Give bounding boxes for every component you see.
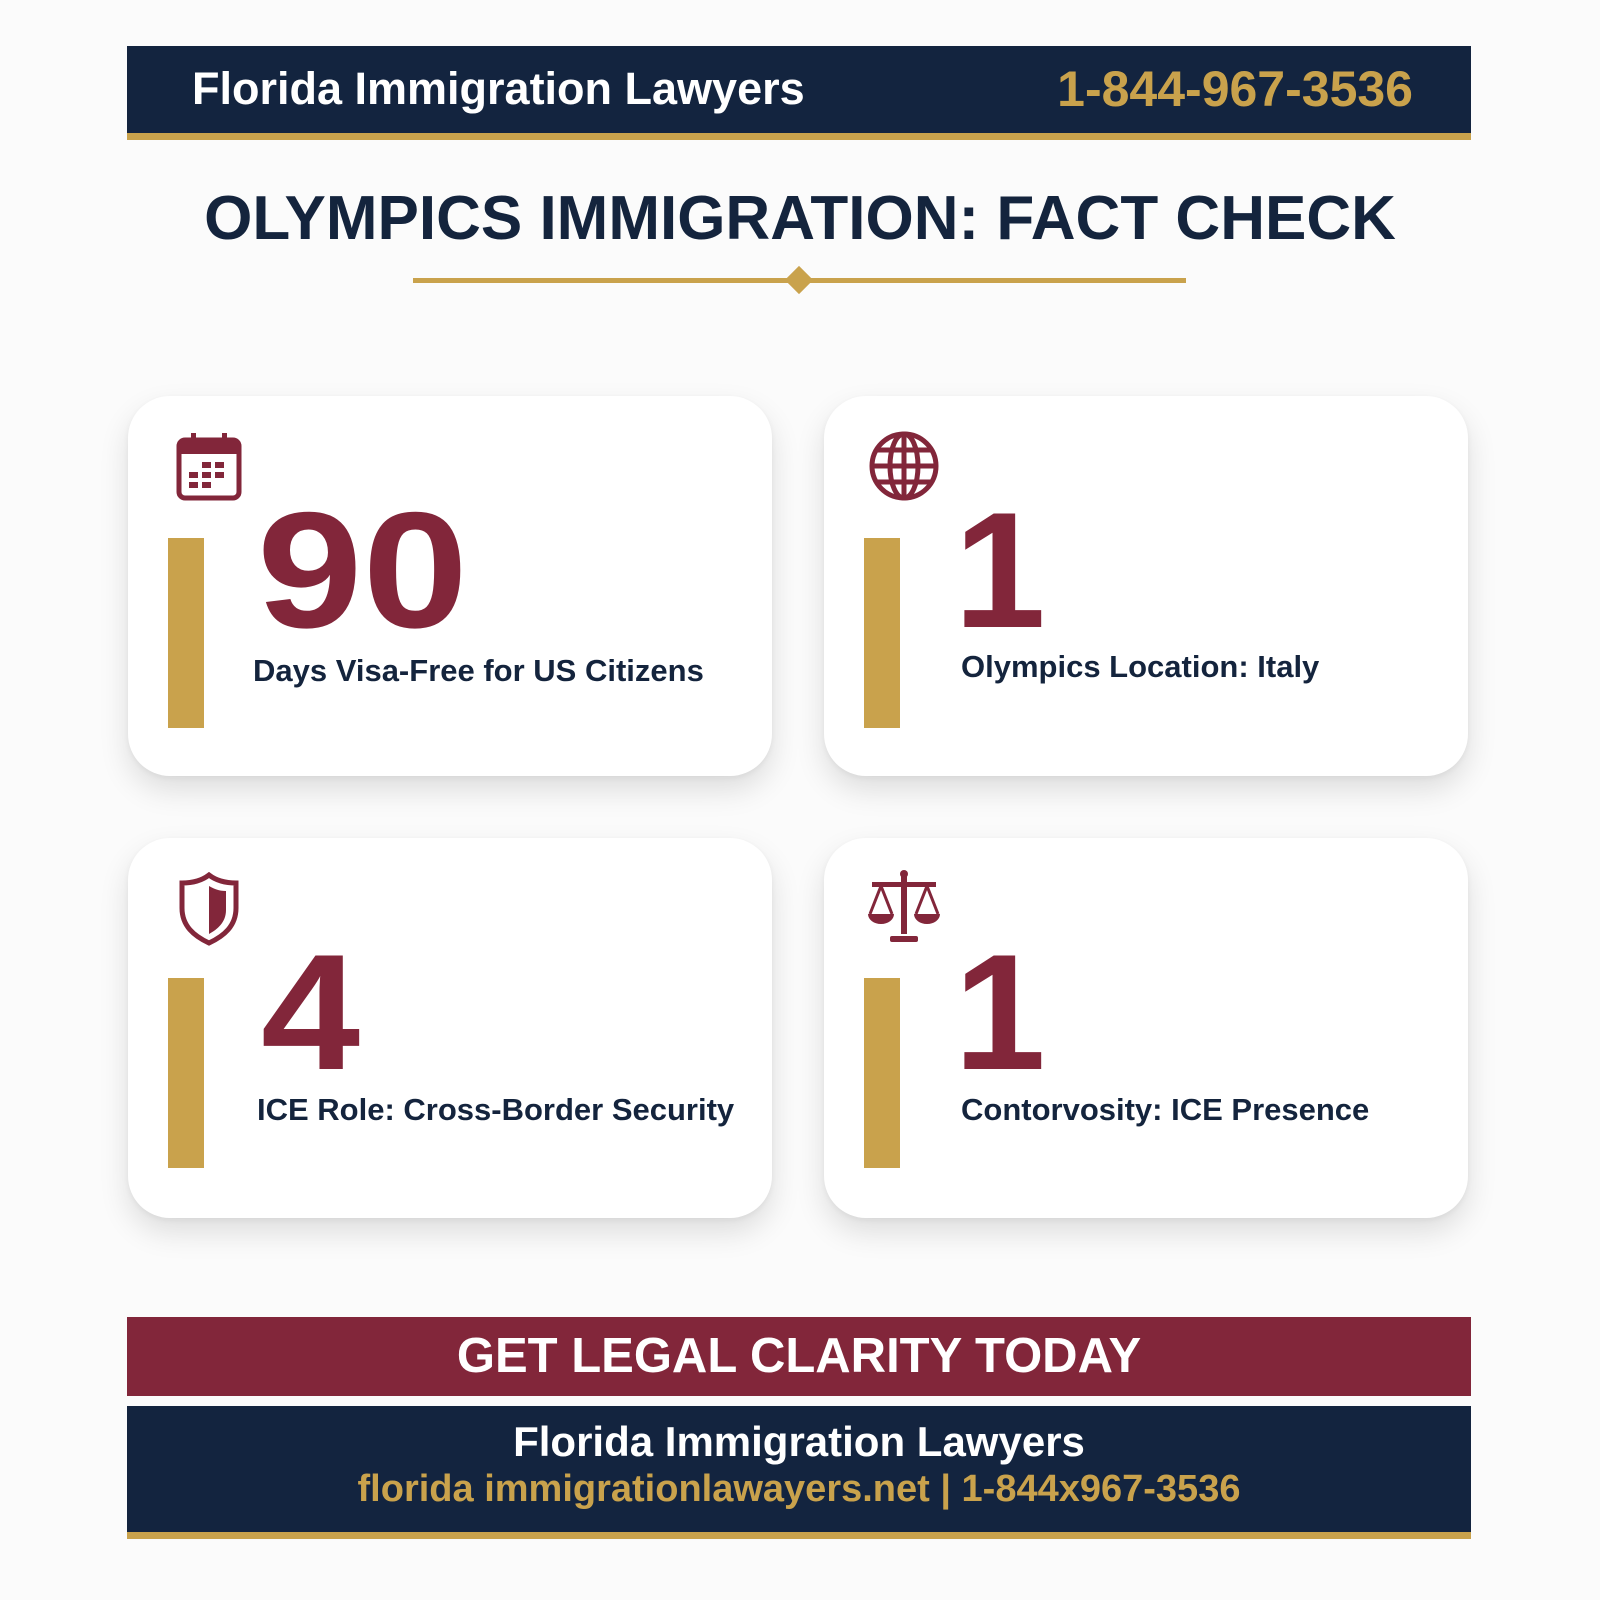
header firm name: Florida Immigration Lawyers [192,63,805,114]
CTA banner: GET LEGAL CLARITY TODAY [457,1329,1141,1383]
title divider [413,266,1186,294]
icon: globe [870,432,938,500]
header bar [127,46,1471,140]
icon: scales [868,870,940,942]
accent bar [864,538,900,728]
panel: 90 days [128,396,772,776]
CTA banner [127,1317,1471,1396]
header phone: 1-844-967-3536 [1057,61,1413,117]
footer firm name: Florida Immigration Lawyers [513,1418,1085,1465]
number 4: 4 [261,920,360,1104]
panel: 1 controversy [824,838,1468,1218]
label: Olympics Location: Italy [961,649,1319,684]
footer contact panel [127,1406,1471,1539]
panel: 4 ICE role [128,838,772,1218]
footer website and phone: florida immigrationlawayers.net | 1-844x967-3536 [358,1468,1240,1510]
icon: shield [180,872,238,946]
number 1: 1 [954,478,1046,662]
number 90: 90 [257,478,468,662]
panel: 1 olympics location [824,396,1468,776]
label: Days Visa-Free for US Citizens [253,653,704,688]
accent bar [168,978,204,1168]
accent bar [168,538,204,728]
accent bar [864,978,900,1168]
label: ICE Role: Cross-Border Security [257,1092,734,1127]
icon: calendar [176,433,242,500]
title: OLYMPICS IMMIGRATION: FACT CHECK [204,184,1396,253]
number 1: 1 [954,920,1046,1104]
label: Contorvosity: ICE Presence [961,1092,1369,1127]
